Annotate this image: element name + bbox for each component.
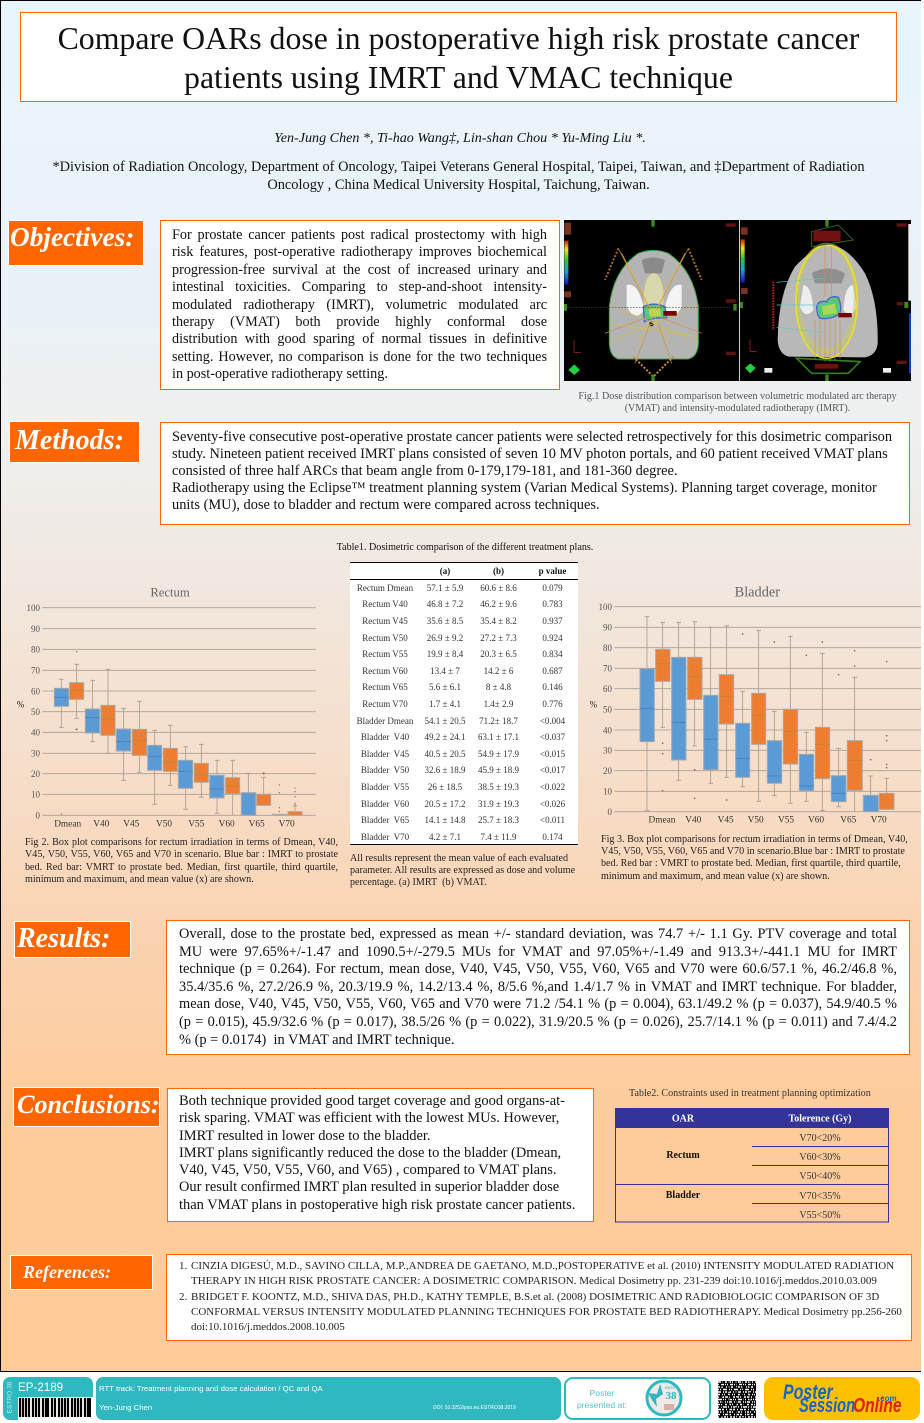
table 1: dosimetric comparison: <0.037 (540, 732, 565, 742)
category labels: V55 (778, 816, 794, 826)
heading: references: References: (23, 1262, 111, 1282)
gridlines and y axis labels: 70 (31, 666, 40, 676)
figure 3 caption: Fig 3. Box plot comparisons for rectum irradiation in terms of Dmean, V40, (601, 834, 908, 845)
table 1: dosimetric comparison: 35.6 ± 8.5 (427, 616, 463, 626)
panel: methods text: consisted of three half ARCs that beam angle from 0-179,179-181, and 181-360 degree. (172, 463, 678, 479)
table 1: dosimetric comparison: 46.2 ± 9.6 (480, 599, 517, 609)
chart: rectum box plot (17, 586, 316, 830)
category labels: V50 (748, 816, 764, 826)
table 1 note (350, 853, 575, 888)
reference 2 (179, 1291, 902, 1333)
table 1: dosimetric comparison: 63.1 ± 17.1 (478, 732, 519, 742)
icon: ESTRO 38 badge: estro (665, 1386, 675, 1391)
reference 2: 2. (179, 1291, 187, 1303)
logo: Online: Online (853, 1395, 902, 1417)
table 1: dosimetric comparison: 27.2 ± 7.3 (480, 633, 517, 643)
table 1: dosimetric comparison: 19.9 ± 8.4 (427, 649, 463, 659)
table 1: dosimetric comparison: <0.004 (540, 716, 565, 726)
table 1: dosimetric comparison: 54.9 ± 17.9 (478, 749, 519, 759)
table 1: dosimetric comparison: 0.937 (542, 616, 563, 626)
table 1: dosimetric comparison (350, 562, 578, 845)
figure 1 caption: Fig.1 Dose distribution comparison between volumetric modulated arc therapy (578, 391, 897, 402)
table 1: dosimetric comparison: 1.4± 2.9 (484, 699, 513, 709)
table 1: dosimetric comparison: 14.1 ± 14.8 (425, 815, 465, 825)
table 2: planning constraints (615, 1108, 889, 1222)
affiliations (52, 159, 865, 193)
category labels: V55 (188, 820, 205, 830)
table 1: dosimetric comparison: Bladder V45 (361, 749, 409, 759)
gridlines and y axis labels: 50 (603, 705, 612, 715)
table 2: planning constraints: V70<20% (799, 1133, 841, 1144)
table 1: dosimetric comparison: Bladder V70 (361, 832, 409, 842)
table 1: dosimetric comparison: Bladder V65 (361, 815, 409, 825)
table 1: dosimetric comparison: 1.7 ± 4.1 (429, 699, 461, 709)
figure 1 caption: (VMAT) and intensity-modulated radiotherapy (IMRT). (625, 403, 850, 414)
panel: methods text (160, 422, 910, 525)
panel: results text (166, 920, 910, 1055)
panel: objectives text: progression-free survival at the cost of increased urinary and (172, 262, 547, 278)
chart title: bladder: Bladder (735, 585, 780, 601)
panel: conclusions text (167, 1088, 594, 1222)
table 1: dosimetric comparison: <0.011 (540, 815, 565, 825)
gridlines and y axis labels: 100 (598, 602, 612, 612)
table 1: dosimetric comparison: 0.924 (542, 633, 563, 643)
heading: objectives (8, 220, 144, 266)
track text: RTT track: Treatment planning and dose calculation / QC and QA (99, 1384, 323, 1393)
gridlines and y axis labels: 60 (31, 686, 40, 696)
table 1: dosimetric comparison: 35.4 ± 8.2 (480, 616, 517, 626)
table 1: dosimetric comparison: 49.2 ± 24.1 (425, 732, 465, 742)
panel: results text: 35.4/35.6 %, 27.2/26.9 %, 20.3/19.9 %, 14.2/13.4 %, 8/5.6 %,and 1.4/1.7 % in VMAT and IMRT technique. For bladder, (179, 979, 897, 995)
figure 3 caption: V45, V50, V55, V60, V65 and V70 in scenario.Blue bar : IMRT to prostate (601, 846, 905, 857)
reference 2: BRIDGET F. KOONTZ, M.D., SHIVA DAS, PH.D., KATHY TEMPLE, B.S.et al. (2008) DOSIMETRIC AND RADIOBIOLOGIC COMPARISON OF 3D (191, 1291, 879, 1303)
gridlines and y axis labels: 40 (603, 725, 612, 735)
panel: methods text: units (MU), dose to bladder and rectum were compared across techniques. (172, 497, 600, 513)
panel: objectives text: distribution with good sparing of normal tissues in definitive (172, 331, 547, 347)
category labels: V60 (808, 816, 824, 826)
table 1: dosimetric comparison: Bladder V55 (361, 782, 409, 792)
gridlines and y axis labels (590, 602, 921, 817)
table 1: dosimetric comparison: 20.5 ± 17.2 (425, 799, 465, 809)
gridlines and y axis labels: 20 (603, 766, 612, 776)
table 1: dosimetric comparison: 5.6 ± 6.1 (429, 682, 461, 692)
table 1: dosimetric comparison: Rectum V40 (362, 599, 408, 609)
table 1: dosimetric comparison: 40.5 ± 20.5 (425, 749, 465, 759)
table 2: planning constraints: V55<50% (799, 1210, 841, 1221)
table 2: planning constraints: V70<35% (799, 1191, 841, 1202)
gridlines and y axis labels: 90 (31, 624, 40, 634)
gridlines and y axis labels (17, 603, 316, 821)
chart: bladder box plot (590, 585, 921, 826)
box plots: IMRT blue (54, 679, 287, 815)
table 1: dosimetric comparison: 0.834 (542, 649, 563, 659)
heading: results (14, 921, 131, 958)
figure 2 caption: Fig 2. Box plot comparisons for rectum irradiation in terms of Dmean, V40, (25, 837, 338, 848)
barcode (19, 1398, 91, 1417)
table 1: dosimetric comparison: 46.8 ± 7.2 (427, 599, 463, 609)
footer: QR code (718, 1381, 756, 1418)
category labels: V70 (871, 816, 887, 826)
table 1: dosimetric comparison: Bladder V40 (361, 732, 409, 742)
table 1: dosimetric comparison: 32.6 ± 18.9 (425, 765, 465, 775)
table 1: dosimetric comparison: 20.3 ± 6.5 (480, 649, 517, 659)
table 1: dosimetric comparison: Rectum Dmean (357, 583, 413, 593)
reference 2: CONFORMAL VERSUS INTENSITY MODULATED PLANNING TECHNIQUES FOR PROSTATE BED RADIOTHERAPY. Medical Dosimetry pp.256-260 (191, 1306, 902, 1318)
table 1: dosimetric comparison: 31.9 ± 19.3 (478, 799, 519, 809)
reference 1: THERAPY IN HIGH RISK PROSTATE CANCER: A DOSIMETRIC COMPARISON. Medical Dosimetry pp. 231-239 doi:10.1016/j.meddos.2010.03.009 (191, 1275, 877, 1287)
track sidebar label: ESTRO 38 (6, 1382, 14, 1413)
gridlines and y axis labels: % (17, 700, 25, 710)
table 1: dosimetric comparison: 45.9 ± 18.9 (478, 765, 519, 775)
icon: ESTRO 38 badge (646, 1380, 682, 1416)
table 1: dosimetric comparison: 38.5 ± 19.3 (478, 782, 519, 792)
panel: methods text: Radiotherapy using the Eclipse™ treatment planning system (Varian Medical Systems). Planning target coverage, monitor (172, 480, 877, 496)
figure 3 caption (601, 834, 908, 882)
gridlines and y axis labels: 80 (31, 645, 40, 655)
panel: objectives text: therapy (VMAT) both provide highly conformal dose (172, 314, 547, 330)
category labels: V65 (840, 816, 857, 826)
left scan: VMAT (564, 220, 737, 381)
doi: DOI: 10.3252/pso.eu.ESTRO38.2019 (433, 1405, 516, 1411)
table 1: dosimetric comparison: <0.026 (540, 799, 565, 809)
footer: poster presented at (564, 1377, 711, 1420)
table 2: planning constraints: Rectum (666, 1150, 700, 1161)
footer: poster id block (3, 1377, 93, 1420)
category labels: Dmean (649, 816, 676, 826)
panel: objectives text: in post-operative radiotherapy setting. (172, 366, 388, 382)
title (20, 12, 897, 102)
gridlines and y axis labels: 80 (603, 643, 612, 653)
table 1: dosimetric comparison: (b) (493, 566, 504, 576)
table 1: dosimetric comparison: 54.1 ± 20.5 (425, 716, 465, 726)
table 2 caption: Table2. Constraints used in treatment planning optimization (629, 1088, 871, 1099)
label: presented at: (577, 1400, 627, 1410)
reference 1: 1. (179, 1260, 187, 1272)
table 1: dosimetric comparison: Bladder V50 (361, 765, 409, 775)
category labels: V45 (718, 816, 734, 826)
box plots: VMAT orange (70, 651, 302, 815)
gridlines and y axis labels: % (590, 700, 598, 710)
category labels: V65 (249, 820, 265, 830)
panel: results text: Overall, dose to the prostate bed, expressed as mean +/- standard deviation, was 74.7 +/- 1.1 Gy. PTV coverage and total (179, 926, 897, 942)
table 1: dosimetric comparison: <0.022 (540, 782, 565, 792)
reference 1: CINZIA DIGESÚ, M.D., SAVINO CILLA, M.P.,ANDREA DE GAETANO, M.D.,POSTOPERATIVE et al. (2010) INTENSITY MODULATED RADIATION (191, 1260, 894, 1272)
table 1: dosimetric comparison: <0.015 (540, 749, 565, 759)
table 1: dosimetric comparison: 60.6 ± 8.6 (480, 583, 517, 593)
table 1: dosimetric comparison: 57.1 ± 5.9 (427, 583, 463, 593)
reference 2: doi:10.1016/j.meddos.2008.10.005 (191, 1321, 345, 1333)
gridlines and y axis labels: 60 (603, 684, 612, 694)
gridlines and y axis labels: 20 (31, 769, 40, 779)
table 1 caption: Table1. Dosimetric comparison of the different treatment plans. (337, 542, 593, 553)
table 1: dosimetric comparison: 26 ± 18.5 (428, 782, 462, 792)
panel: conclusions text: Our result confirmed IMRT plan resulted in superior bladder dose (179, 1179, 559, 1195)
category labels: V50 (156, 820, 172, 830)
gridlines and y axis labels: 0 (608, 807, 612, 817)
figure 1 caption (578, 391, 897, 414)
panel: results text: technique (p = 0.264). For rectum, mean dose, V40, V45, V50, V55, V60, V65 and V70 were 60.6/57.1 %, 46.2/46.8 %, (179, 961, 897, 977)
table 2: planning constraints: Tolerence (Gy) (788, 1114, 852, 1124)
panel: objectives text: intestinal toxicities. Comparing to step-and-shoot intensity- (172, 279, 547, 295)
figure 1: dose distribution images (564, 220, 911, 381)
logo: Session: Session (799, 1395, 855, 1417)
table 1: dosimetric comparison: 0.776 (542, 699, 563, 709)
panel: results text: % (p = 0.0174) in VMAT and IMRT technique. (179, 1032, 454, 1048)
table 1: dosimetric comparison: 0.146 (542, 682, 563, 692)
table 1: dosimetric comparison: <0.017 (540, 765, 565, 775)
gridlines and y axis labels: 10 (31, 790, 40, 800)
icon: ESTRO 38 badge: 38 (666, 1390, 677, 1402)
panel: objectives text: modulated radiotherapy (IMRT), volumetric modulated arc (172, 297, 547, 313)
table 1 note: All results represent the mean value of each evaluated (350, 853, 568, 864)
figure 2 caption (25, 837, 338, 885)
panel: methods text: study. Nineteen patient received IMRT plans consisted of seven 10 MV photon portals, and 60 patient received VMAT plans (172, 446, 888, 462)
reference 1 (179, 1260, 894, 1287)
table 1: dosimetric comparison: 71.2± 18.7 (479, 716, 518, 726)
panel: objectives text: setting. However, no comparison is done for the two techniques (172, 349, 547, 365)
title: Compare OARs dose in postoperative high risk prostate cancer (58, 21, 859, 56)
title: patients using IMRT and VMAC technique (184, 60, 733, 94)
heading: conclusions: Conclusions: (17, 1090, 160, 1119)
panel: conclusions text: Both technique provided good target coverage and good organs-at- (179, 1093, 565, 1109)
table 1: dosimetric comparison: 4.2 ± 7.1 (429, 832, 461, 842)
category labels (54, 820, 295, 830)
table 1: dosimetric comparison: (a) (440, 566, 450, 576)
panel: objectives text: For prostate cancer patients post radical prostectomy with high (172, 227, 547, 243)
category labels: V40 (685, 816, 702, 826)
gridlines and y axis labels: 40 (31, 728, 40, 738)
table 1: dosimetric comparison: 25.7 ± 18.3 (478, 815, 519, 825)
table 1: dosimetric comparison: 0.079 (542, 583, 563, 593)
category labels: V40 (93, 820, 110, 830)
panel: methods text: Seventy-five consecutive post-operative prostate cancer patients were selected retrospectively for this dosimetric comparison (172, 429, 892, 445)
table 1 note: percentage. (a) IMRT (b) VMAT. (350, 877, 487, 888)
table 1: dosimetric comparison: Rectum V60 (362, 666, 408, 676)
label (577, 1388, 627, 1410)
table 2: planning constraints: Bladder (666, 1190, 701, 1201)
figure 3 caption: bed. Red bar : VMRT to prostate bed. Median, first quartile, third quartile, (601, 858, 901, 869)
right scan: IMRT (740, 220, 908, 381)
gridlines and y axis labels: 70 (603, 664, 612, 674)
panel: results text: mean dose, V40, V45, V50, V55, V60, V65 and V70 were 71.2 /54.1 % (p = 0.004), 63.1/49.2 % (p = 0.037), 54.9/40.5 % (179, 996, 897, 1012)
category labels: V70 (279, 820, 295, 830)
gridlines and y axis labels: 50 (31, 707, 40, 717)
category labels: Dmean (54, 820, 81, 830)
table 1: dosimetric comparison: Rectum V45 (362, 616, 408, 626)
panel: conclusions text: V40, V45, V50, V55, V60, and V65) , compared to VMAT plans. (179, 1162, 557, 1178)
table 1: dosimetric comparison: Rectum V50 (362, 633, 408, 643)
table 1: dosimetric comparison: Rectum V70 (362, 699, 408, 709)
table 1: dosimetric comparison: p value (539, 566, 566, 576)
panel: references text (166, 1254, 912, 1341)
table 1: dosimetric comparison: Bladder V60 (361, 799, 409, 809)
panel: objectives text (160, 220, 560, 390)
author: Yen-Jung Chen (99, 1403, 152, 1412)
box plots: VMAT orange (656, 622, 894, 812)
logo: Poster: Poster (783, 1381, 833, 1404)
footer: track and author (96, 1377, 561, 1420)
category labels: V45 (123, 820, 140, 830)
table 1: dosimetric comparison: 13.4 ± 7 (430, 666, 460, 676)
table 1 note: parameter. All results are expressed as dose and volume (350, 865, 575, 876)
box plots: IMRT blue (640, 617, 878, 812)
table 2: planning constraints: V50<40% (799, 1171, 841, 1182)
table 1: dosimetric comparison: Bladder Dmean (357, 716, 413, 726)
gridlines and y axis labels: 10 (603, 787, 612, 797)
chart title: rectum: Rectum (150, 586, 190, 600)
heading: references (10, 1255, 153, 1290)
table 1: dosimetric comparison: Rectum V65 (362, 682, 408, 692)
figure 3 caption: minimum and maximum, and mean value (x) are shown. (601, 871, 830, 882)
table 1: dosimetric comparison: 0.687 (542, 666, 563, 676)
table 2: planning constraints: V60<30% (799, 1152, 841, 1163)
figure 2 caption: bed. Red bar: VMRT to prostate bed. Median, first quartile, third quartile, (25, 862, 338, 873)
panel: conclusions text: than VMAT plans in postoperative high risk prostate cancer patients. (179, 1197, 575, 1213)
table 2: planning constraints: OAR (672, 1114, 695, 1124)
gridlines and y axis labels: 30 (603, 746, 612, 756)
gridlines and y axis labels: 90 (603, 623, 612, 633)
table 1: dosimetric comparison: 0.783 (542, 599, 563, 609)
heading: results: Results: (17, 923, 110, 954)
affiliations: *Division of Radiation Oncology, Department of Oncology, Taipei Veterans General Hospital, Taipei, Taiwan, and ‡Department of Radiation (52, 159, 865, 175)
heading: objectives: Objectives: (10, 222, 134, 252)
gridlines and y axis labels: 30 (31, 749, 40, 759)
poster number: EP-2189 (18, 1381, 63, 1394)
logo: .com: .com (878, 1394, 897, 1403)
table 1: dosimetric comparison: 8 ± 4.8 (486, 682, 511, 692)
figure 2 caption: minimum and maximum, and mean value (x) are shown. (25, 874, 254, 885)
panel: results text: (p = 0.015), 45.9/32.6 % (p = 0.017), 38.5/26 % (p = 0.022), 31.9/20.5 % (p = 0.026), 25.7/14.1 % (p = 0.011) and 7.4/4.2 (179, 1014, 897, 1030)
heading: methods: Methods: (15, 425, 124, 456)
table 1: dosimetric comparison: 14.2 ± 6 (484, 666, 513, 676)
teal tab (3, 1377, 93, 1397)
table 1: dosimetric comparison: 7.4 ± 11.9 (480, 832, 517, 842)
footer: PosterSessionOnline logo (764, 1377, 920, 1420)
gridlines and y axis labels: 0 (36, 811, 40, 821)
gridlines and y axis labels: 100 (26, 603, 40, 613)
teal side column (3, 1397, 18, 1420)
panel: objectives text: risk features, post-operative radiotherapy improves biochemical (172, 244, 547, 260)
panel: results text: MU were 97.65%+/-1.47 and 1090.5+/-279.5 MUs for VMAT and 97.05%+/-1.49 and 913.3+/-441.1 MU for IMRT (179, 944, 897, 960)
heading: methods (9, 421, 140, 463)
figure 2 caption: V45, V50, V55, V60, V65 and V70 in scenario. Blue bar : IMRT to prostate (25, 849, 338, 860)
label: Poster (590, 1388, 614, 1398)
panel: conclusions text: risk sparing. VMAT was efficient with the lowest MUs. However, (179, 1110, 559, 1126)
table 1: dosimetric comparison: 0.174 (542, 832, 563, 842)
category labels: V60 (219, 820, 235, 830)
category labels (649, 816, 887, 826)
panel: conclusions text: IMRT plans significantly reduced the dose to the bladder (Dmean, (179, 1145, 561, 1161)
authors: Yen-Jung Chen *, Ti-hao Wang‡, Lin-shan Chou * Yu-Ming Liu *. (274, 130, 646, 146)
table 1: dosimetric comparison: 26.9 ± 9.2 (427, 633, 463, 643)
table 1: dosimetric comparison: Rectum V55 (362, 649, 408, 659)
affiliations: Oncology , China Medical University Hospital, Taichung, Taiwan. (267, 177, 650, 193)
panel: conclusions text: IMRT resulted in lower dose to the bladder. (179, 1128, 430, 1144)
